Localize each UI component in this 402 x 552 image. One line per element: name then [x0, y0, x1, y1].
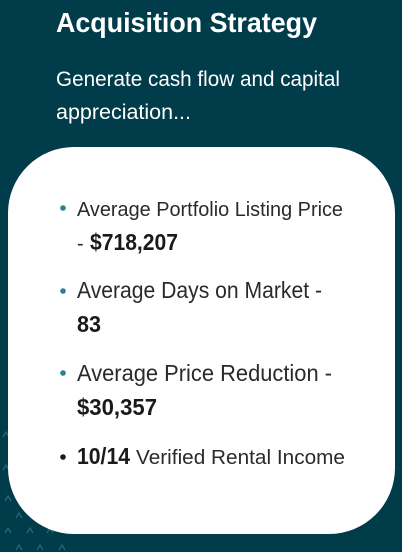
list item: average price reduction — [60, 360, 332, 420]
panel: white card — [8, 147, 395, 534]
list item: average listing price: Average Portfolio Listing Price — [77, 198, 343, 221]
list item: verified rental income: Verified Rental Income — [136, 446, 345, 469]
list item: average price reduction: Average Price Reduction - — [77, 360, 332, 386]
list item: average days on market: Average Days on Market - — [77, 277, 322, 303]
subtitle — [56, 67, 340, 124]
title: Acquisition Strategy — [56, 7, 318, 38]
list item: verified rental income: 10/14 — [77, 443, 130, 469]
list item: average days on market: 83 — [77, 311, 101, 337]
list item: verified rental income — [60, 443, 345, 469]
list item: average listing price: $718,207 — [90, 229, 178, 255]
list item: average listing price: - — [77, 233, 84, 255]
list item: average price reduction: $30,357 — [77, 394, 157, 420]
list item: average listing price — [60, 198, 343, 255]
decorative chevron pattern — [3, 432, 65, 550]
list item: average days on market — [60, 277, 322, 337]
subtitle: Generate cash flow and capital — [56, 67, 340, 91]
subtitle: appreciation... — [56, 100, 191, 124]
